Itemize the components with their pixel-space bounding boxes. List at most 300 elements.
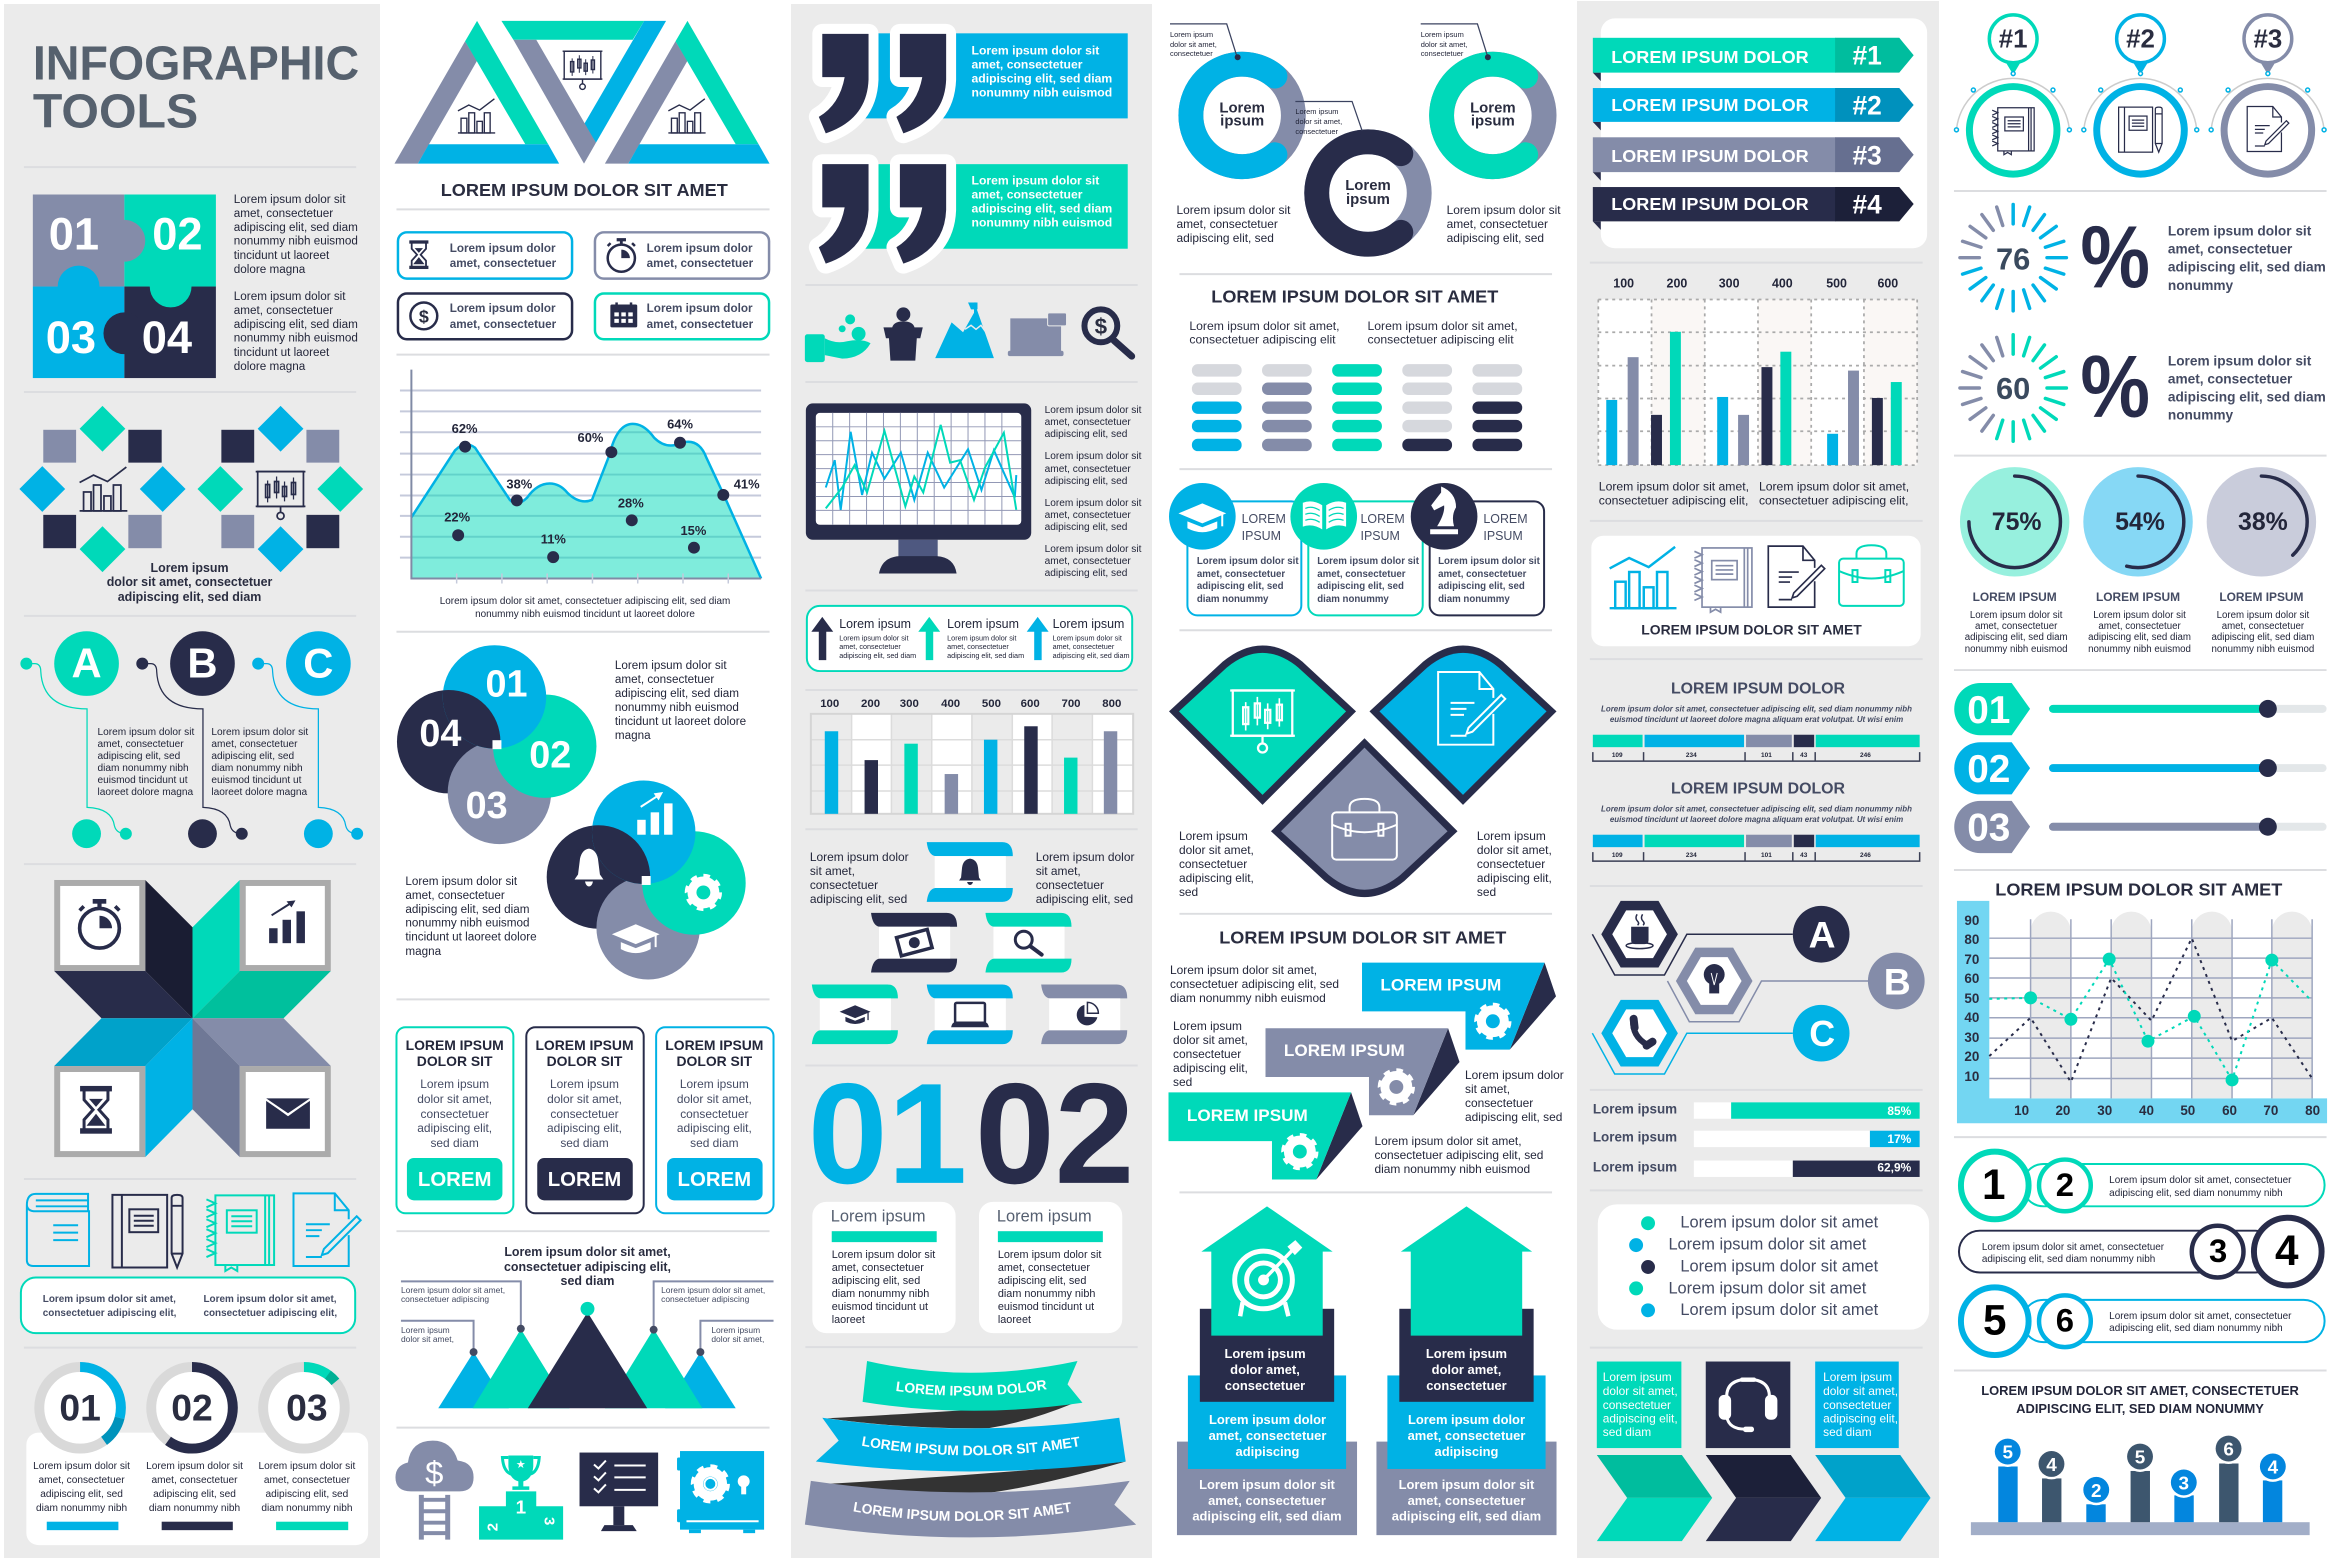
- heading text: consectetuer adipiscing elit: [1367, 333, 1514, 347]
- card navy: adipiscing elit,: [547, 1121, 622, 1135]
- venn icons text: tincidunt ut laoreet dolore: [405, 931, 537, 944]
- donut captions: adipiscing elit, sed: [1176, 231, 1274, 245]
- tag texts: Lorem ipsum dolor sit amet,: [1170, 963, 1317, 977]
- progress circle 75%: [1960, 467, 2069, 655]
- hexagon C: [1592, 1000, 1850, 1074]
- dashed line chart: 60: [1964, 971, 1979, 986]
- venn text: nonummy nibh euismod: [615, 701, 739, 714]
- house stack left: [1177, 1206, 1357, 1535]
- venn numbers: 02: [529, 735, 571, 777]
- lollipop heading: LOREM IPSUM DOLOR SIT AMET, CONSECTETUER: [1981, 1383, 2299, 1398]
- lollipop chart: 2: [2091, 1481, 2102, 1502]
- teal donut: ipsum: [1471, 112, 1515, 129]
- card 01: amet, consectetuer: [832, 1262, 924, 1274]
- house stack right: consectetuer: [1426, 1378, 1507, 1393]
- diamond text: consectetuer: [1477, 857, 1545, 871]
- icon cards: LOREM: [1483, 512, 1528, 526]
- dotted column chart: 600: [1877, 277, 1898, 291]
- arrows box: [807, 606, 1132, 671]
- number pill 3-4: [1959, 1218, 2322, 1285]
- card teal: [396, 1027, 513, 1213]
- ribbon banners: LOREM IPSUM DOLOR: [896, 1380, 1047, 1396]
- tag blue: [1362, 963, 1556, 1050]
- number pill 3-4: adipiscing elit, sed diam nonummy nibh: [1982, 1254, 2155, 1265]
- A B C timeline: C: [303, 640, 333, 687]
- donut callouts: Lorem ipsum: [1295, 107, 1338, 116]
- teal quote banner: [819, 164, 1128, 264]
- A B C timeline: adipiscing elit, sed: [98, 751, 180, 762]
- card navy: DOLOR SIT: [547, 1053, 623, 1069]
- card 01: diam nonummy nibh: [832, 1288, 929, 1300]
- gauge 76 text: Lorem ipsum dolor sit: [2168, 223, 2312, 238]
- donut captions: adipiscing elit, sed: [40, 1489, 123, 1500]
- icon cards: [1169, 483, 1544, 615]
- heading text: Lorem ipsum dolor sit amet,: [1189, 319, 1340, 333]
- progress circle 38%: amet, consectetuer: [2222, 621, 2305, 632]
- card navy: [526, 1027, 644, 1213]
- puzzle text: nonummy nibh euismod: [234, 332, 358, 345]
- icon: monitor checklist: [580, 1453, 658, 1531]
- diamond text: adipiscing elit,: [1179, 871, 1254, 885]
- ribbon text: consectetuer: [810, 878, 878, 892]
- card 02: [979, 1202, 1122, 1333]
- number pill 5-6: adipiscing elit, sed diam nonummy nibh: [2109, 1323, 2283, 1334]
- venn text: Lorem ipsum dolor sit: [615, 659, 727, 672]
- arrows box: Lorem ipsum dolor sit: [839, 634, 909, 643]
- card navy: Lorem ipsum: [550, 1077, 619, 1091]
- card navy: dolor sit amet,: [547, 1092, 622, 1106]
- column chart 100-800: 200: [861, 698, 880, 710]
- venn with icons: [547, 780, 746, 979]
- icons caption box: Lorem ipsum dolor sit amet,: [203, 1294, 337, 1305]
- card teal: dolor sit amet,: [417, 1092, 492, 1106]
- segmented bar 1: LOREM IPSUM DOLOR: [1671, 680, 1846, 697]
- chart text: Lorem ipsum dolor sit amet,: [1759, 479, 1909, 493]
- bullet list: [1598, 1204, 1929, 1330]
- slider 02: 02: [1967, 748, 2010, 791]
- hexagon C: C: [1809, 1014, 1835, 1054]
- chart text: consectetuer adipiscing elit,: [1759, 493, 1909, 507]
- progress circle 75%: 75%: [1992, 508, 2042, 536]
- ranking banners: LOREM IPSUM DOLOR: [1611, 95, 1809, 115]
- icon pills: amet, consectetuer: [647, 318, 754, 331]
- dashed line chart: 30: [1964, 1030, 1979, 1045]
- icon: podium and trophy: 3: [541, 1517, 558, 1525]
- ribbon icon: bell: [927, 842, 1013, 902]
- monitor text: amet, consectetuer: [1045, 464, 1131, 475]
- segmented bar 2: 246: [1860, 852, 1871, 859]
- title: TOOLS: [33, 84, 198, 138]
- tag gray: LOREM IPSUM: [1284, 1042, 1405, 1060]
- progress circle 38%: 38%: [2238, 508, 2288, 536]
- slider 01: [1954, 683, 2327, 735]
- house stack left: adipiscing elit, sed diam: [1192, 1509, 1342, 1524]
- icons caption box: consectetuer adipiscing elit,: [43, 1308, 177, 1319]
- card teal: consectetuer: [421, 1107, 489, 1121]
- number pill 5-6: 6: [2056, 1302, 2074, 1339]
- puzzle text: dolore magna: [234, 360, 306, 373]
- monitor text: amet, consectetuer: [1045, 510, 1131, 521]
- puzzle text: adipiscing elit, sed diam: [234, 318, 358, 331]
- mountain chart heading: sed diam: [561, 1274, 614, 1288]
- icon pills: $: [419, 306, 429, 326]
- icon cards: Lorem ipsum dolor sit: [1317, 556, 1420, 567]
- card navy: consectetuer: [550, 1107, 619, 1121]
- card 01: [812, 1202, 956, 1333]
- puzzle 01-04: [33, 195, 216, 378]
- bullet list: Lorem ipsum dolor sit amet: [1668, 1279, 1867, 1297]
- ribbon banners: [804, 1361, 1136, 1538]
- gauge 60 text: adipiscing elit, sed diam: [2168, 389, 2326, 404]
- house stack left: Lorem ipsum dolor: [1209, 1412, 1326, 1427]
- arrows box: Lorem ipsum dolor sit: [947, 634, 1016, 643]
- blue donut: ipsum: [1220, 112, 1264, 129]
- segmented bar 1: Lorem ipsum dolor sit amet, consectetuer adipiscing elit, sed diam nonummy nibh: [1601, 704, 1912, 713]
- area chart caption: Lorem ipsum dolor sit amet, consectetuer adipiscing elit, sed diam: [440, 596, 730, 607]
- card navy: sed diam: [560, 1136, 609, 1150]
- tag teal: LOREM IPSUM: [1187, 1107, 1308, 1125]
- dotted column chart: 300: [1719, 277, 1740, 291]
- number pill 5-6: 5: [1983, 1297, 2007, 1344]
- icon: podium and trophy: [479, 1456, 563, 1540]
- teal diamond: [1169, 645, 1356, 805]
- card blue: sed diam: [690, 1136, 739, 1150]
- card blue: Lorem ipsum: [680, 1077, 749, 1091]
- gauge 60 text: amet, consectetuer: [2168, 372, 2293, 387]
- icon pills: [398, 232, 769, 339]
- puzzle text: nonummy nibh euismod: [234, 235, 358, 248]
- monitor text: amet, consectetuer: [1045, 556, 1131, 567]
- pin badge 2: [2082, 15, 2199, 174]
- icon cards: Lorem ipsum dolor sit: [1197, 556, 1299, 567]
- number pill 3-4: 4: [2275, 1227, 2299, 1274]
- teal quote banner: nonummy nibh euismod: [972, 215, 1112, 229]
- donut panel: [26, 1433, 368, 1545]
- donut 02: [151, 1367, 233, 1449]
- column chart 100-800: 700: [1061, 698, 1081, 710]
- icon cards: adipiscing elit, sed: [1438, 581, 1525, 592]
- card teal: sed diam: [430, 1136, 479, 1150]
- icon: podium and trophy: 1: [516, 1498, 526, 1519]
- big number 01: 01: [808, 1054, 967, 1214]
- gauge 60 text: Lorem ipsum dolor sit: [2168, 354, 2312, 369]
- donut captions: amet, consectetuer: [151, 1475, 238, 1486]
- blue quote banner: Lorem ipsum dolor sit: [972, 44, 1099, 58]
- donut captions: [33, 1461, 356, 1530]
- puzzle 01-04: 04: [142, 312, 192, 363]
- column chart 100-800: 800: [1102, 698, 1121, 710]
- house stack right: amet, consectetuer: [1408, 1493, 1525, 1508]
- donut captions: amet, consectetuer: [264, 1475, 351, 1486]
- dotted column chart: 200: [1667, 277, 1687, 291]
- horizontal progress bars: [1593, 1101, 1920, 1177]
- percent sign 1: %: [2080, 208, 2150, 307]
- donut captions: diam nonummy nibh: [261, 1503, 353, 1514]
- chart text: consectetuer adipiscing elit,: [1599, 493, 1748, 507]
- dashed line chart: 90: [1964, 913, 1979, 928]
- card 01: euismod tincidunt ut: [832, 1301, 928, 1313]
- card blue: LOREM IPSUM: [665, 1037, 763, 1053]
- card 02: Lorem ipsum: [997, 1208, 1092, 1226]
- dashed line chart: 50: [2180, 1103, 2195, 1118]
- bullet list: Lorem ipsum dolor sit amet: [1680, 1301, 1879, 1319]
- slider 03: [1954, 801, 2327, 853]
- area chart: 38%: [506, 476, 533, 491]
- venn icons text: nonummy nibh euismod: [405, 917, 530, 930]
- donut 03: [263, 1367, 345, 1449]
- icon pills: amet, consectetuer: [450, 257, 557, 270]
- A B C timeline: Lorem ipsum dolor sit: [98, 727, 194, 738]
- chevron text blue: dolor sit amet,: [1823, 1384, 1898, 1398]
- ribbon text: adipiscing elit, sed: [1036, 892, 1133, 906]
- tag texts: dolor sit amet,: [1173, 1033, 1248, 1047]
- ranking banners: #2: [1853, 90, 1882, 120]
- ribbon text: sit amet,: [1036, 864, 1081, 878]
- icon: hand with coins: [805, 314, 871, 362]
- house stack right: adipiscing elit, sed diam: [1392, 1509, 1541, 1524]
- icons panel: [1591, 536, 1921, 646]
- diamond ring with chart icon: [19, 406, 186, 572]
- mountain chart: [401, 1281, 774, 1408]
- bullet list: Lorem ipsum dolor sit amet: [1668, 1236, 1867, 1254]
- icon cards: amet, consectetuer: [1317, 569, 1406, 580]
- mountain chart heading: Lorem ipsum dolor sit amet,: [504, 1245, 671, 1259]
- lollipop chart: 3: [2179, 1473, 2189, 1494]
- ranking banners: #4: [1853, 189, 1882, 219]
- card 02: Lorem ipsum dolor sit: [998, 1249, 1101, 1261]
- A B C timeline: Lorem ipsum dolor sit: [211, 727, 308, 738]
- house stack right: adipiscing: [1435, 1444, 1499, 1459]
- dotted column chart: 500: [1826, 277, 1847, 291]
- A B C timeline: diam nonummy nibh: [211, 763, 303, 774]
- venn icons text: magna: [405, 945, 442, 958]
- chevron text teal: [1597, 1362, 1681, 1448]
- blue quote banner: amet, consectetuer: [972, 58, 1083, 72]
- teal quote banner: Lorem ipsum dolor sit: [972, 174, 1099, 188]
- monitor line chart: [806, 403, 1031, 574]
- dotted column chart: 400: [1772, 277, 1793, 291]
- icon pills: amet, consectetuer: [450, 318, 557, 331]
- venn numbers: 03: [466, 785, 508, 827]
- chevron text teal: Lorem ipsum: [1603, 1370, 1672, 1384]
- card teal: LOREM: [418, 1169, 491, 1191]
- chevron text teal: consectetuer: [1603, 1398, 1671, 1412]
- navy donut: Lorem: [1345, 177, 1391, 194]
- icons caption box: Lorem ipsum dolor sit amet,: [43, 1294, 176, 1305]
- card 01: Lorem ipsum: [831, 1208, 926, 1226]
- area chart: 62%: [452, 421, 478, 436]
- diamond caption: adipiscing elit, sed diam: [118, 590, 261, 604]
- house stack right: Lorem ipsum: [1426, 1346, 1507, 1361]
- number pill 1-2: Lorem ipsum dolor sit amet, consectetuer: [2109, 1175, 2292, 1186]
- columns 3 and 4, lower half: [804, 738, 1564, 1538]
- puzzle text: Lorem ipsum dolor sit: [234, 290, 346, 303]
- radial gauge 76: 76: [1996, 242, 2030, 277]
- navy donut: [1317, 142, 1419, 244]
- horizontal progress bars: Lorem ipsum: [1593, 1130, 1677, 1145]
- venn numbers: [397, 645, 596, 844]
- blue quote banner: nonummy nibh euismod: [972, 86, 1112, 100]
- icon cards: IPSUM: [1242, 529, 1281, 543]
- slider 01: 01: [1967, 689, 2010, 732]
- progress circle 54%: [2083, 467, 2193, 655]
- dotted column chart: 100: [1613, 277, 1634, 291]
- icon cards: IPSUM: [1361, 529, 1400, 543]
- gray diamond: [1271, 738, 1458, 897]
- tag texts: adipiscing elit, sed: [1465, 1110, 1562, 1124]
- pin badge 1: #1: [1999, 25, 2028, 53]
- donut 02: 02: [171, 1387, 213, 1429]
- icon: safe: [677, 1451, 764, 1533]
- card blue: DOLOR SIT: [676, 1053, 753, 1069]
- ribbon icon: pie: [1041, 984, 1127, 1044]
- donut captions: Lorem ipsum dolor sit: [1447, 203, 1561, 217]
- ribbon text: consectetuer: [1036, 878, 1104, 892]
- progress circle 75%: adipiscing elit, sed diam: [1965, 632, 2068, 643]
- icon pills: amet, consectetuer: [647, 257, 754, 270]
- monitor text: adipiscing elit, sed: [1045, 568, 1127, 579]
- dashed line chart: [1957, 901, 2327, 1123]
- dashed line chart: 20: [2055, 1103, 2070, 1118]
- panel: column 5 background: [1577, 1, 1939, 1558]
- number pill 5-6: [1961, 1287, 2325, 1355]
- puzzle 01-04: 03: [46, 312, 96, 363]
- gauge 60 text: nonummy: [2168, 407, 2234, 422]
- tag texts: consectetuer adipiscing elit, sed: [1170, 977, 1339, 991]
- A B C timeline: amet, consectetuer: [98, 739, 184, 750]
- monitor text: adipiscing elit, sed: [1045, 476, 1127, 487]
- dashed line chart: 30: [2097, 1103, 2112, 1118]
- mountain chart: consectetuer adipiscing: [661, 1294, 750, 1304]
- monitor text: Lorem ipsum dolor sit: [1045, 451, 1142, 462]
- icon cards: amet, consectetuer: [1438, 569, 1527, 580]
- area chart: 11%: [541, 532, 566, 547]
- segmented bar 1: euismod tincidunt ut laoreet dolore magna aliquam erat volutpat. Ut wisi enim: [1610, 715, 1903, 724]
- icon: podium and trophy: ★: [516, 1459, 526, 1471]
- area chart: 41%: [734, 476, 760, 491]
- mountain chart: Lorem ipsum: [711, 1325, 760, 1335]
- diamond text: dolor sit amet,: [1179, 843, 1254, 857]
- columns 1 and 2, upper half: [19, 21, 770, 848]
- panel: column 3 background: [791, 4, 1152, 1558]
- icon cards: Lorem ipsum dolor sit: [1438, 556, 1541, 567]
- card blue: LOREM: [678, 1169, 751, 1191]
- icon: magnifier dollar: [1084, 309, 1132, 356]
- teal quote banner: amet, consectetuer: [972, 187, 1083, 201]
- house stack left: adipiscing: [1236, 1444, 1300, 1459]
- donut 03: 03: [286, 1387, 328, 1429]
- icon: mountain flag: [935, 302, 994, 358]
- tag texts: sit amet,: [1465, 1082, 1510, 1096]
- ribbon icon: laptop: [927, 984, 1013, 1044]
- venn numbers: 01: [486, 663, 528, 705]
- teal donut: Lorem: [1470, 99, 1516, 116]
- donut captions: Lorem ipsum dolor sit: [1176, 203, 1291, 217]
- tag texts: diam nonummy nibh euismod: [1374, 1162, 1530, 1176]
- chevron text teal: adipiscing elit,: [1603, 1412, 1678, 1426]
- blue quote banner: adipiscing elit, sed diam: [972, 72, 1112, 86]
- column chart 100-800: 100: [820, 698, 839, 710]
- house stack left: Lorem ipsum dolor sit: [1199, 1477, 1336, 1492]
- icon cards: adipiscing elit, sed: [1197, 581, 1284, 592]
- ribbon text: sit amet,: [810, 864, 855, 878]
- progress circle 54%: adipiscing elit, sed diam: [2088, 632, 2191, 643]
- donut captions: amet, consectetuer: [39, 1475, 125, 1486]
- donut captions: Lorem ipsum dolor sit: [33, 1461, 130, 1472]
- progress circle 54%: amet, consectetuer: [2098, 621, 2181, 632]
- diamond text: sed: [1477, 885, 1496, 899]
- puzzle 01-04: 02: [152, 209, 203, 260]
- tag texts: diam nonummy nibh euismod: [1170, 991, 1326, 1005]
- progress circle 38%: LOREM IPSUM: [2219, 590, 2304, 604]
- donut 01: [39, 1367, 121, 1449]
- dashed line chart: 60: [2222, 1103, 2237, 1118]
- puzzle text: dolore magna: [234, 263, 306, 276]
- progress circle 54%: Lorem ipsum dolor sit: [2093, 610, 2186, 621]
- donut captions: adipiscing elit, sed: [266, 1489, 348, 1500]
- donut callouts: [1170, 24, 1491, 136]
- arrows box: amet, consectetuer: [1053, 642, 1115, 651]
- tag texts: consectetuer: [1173, 1047, 1241, 1061]
- panel: column 1 background: [4, 4, 380, 1558]
- hexagon A: [1592, 901, 1850, 975]
- area chart: 22%: [444, 509, 471, 524]
- gauge 76 text: adipiscing elit, sed diam: [2168, 260, 2326, 275]
- icon cards: LOREM: [1361, 512, 1405, 526]
- segmented bar 1: 101: [1761, 752, 1772, 759]
- chevron text teal: dolor sit amet,: [1603, 1384, 1678, 1398]
- arrows box: Lorem ipsum: [1053, 617, 1124, 631]
- dashed line chart: 10: [1964, 1069, 1979, 1084]
- columns 1 and 2, lower half: [21, 780, 774, 1545]
- number pill 5-6: Lorem ipsum dolor sit amet, consectetuer: [2109, 1311, 2292, 1322]
- A B C timeline: diam nonummy nibh: [98, 763, 189, 774]
- diamond text: Lorem ipsum: [1179, 829, 1248, 843]
- tag texts: adipiscing elit,: [1173, 1061, 1248, 1075]
- donut captions: amet, consectetuer: [1176, 217, 1278, 231]
- progress circle 54%: nonummy nibh euismod: [2088, 644, 2191, 655]
- horizontal progress bars: 62,9%: [1877, 1160, 1912, 1174]
- chevron arrows: [1597, 1455, 1931, 1541]
- dashed line chart: 50: [1964, 991, 1979, 1006]
- donut callouts: Lorem ipsum: [1170, 30, 1213, 39]
- mountain chart: Lorem ipsum: [401, 1325, 450, 1335]
- segmented bar 2: euismod tincidunt ut laoreet dolore magna aliquam erat volutpat. Ut wisi enim: [1610, 815, 1903, 824]
- mountain chart: dolor sit amet,: [401, 1334, 454, 1344]
- venn icons text: adipiscing elit, sed diam: [405, 903, 530, 916]
- diamond caption: dolor sit amet, consectetuer: [107, 575, 273, 589]
- house stack left: dolor amet,: [1230, 1362, 1300, 1377]
- arrows box: Lorem ipsum: [839, 617, 911, 631]
- ribbon text: adipiscing elit, sed: [810, 892, 907, 906]
- ranking banners: #3: [1853, 141, 1882, 171]
- donut captions: Lorem ipsum dolor sit: [259, 1461, 356, 1472]
- donut callouts: dolor sit amet,: [1170, 40, 1217, 49]
- ranking banners: LOREM IPSUM DOLOR: [1611, 146, 1809, 166]
- ranking banners: LOREM IPSUM DOLOR: [1611, 194, 1809, 214]
- column chart 100-800: 400: [941, 698, 960, 710]
- icon: laptop: [1008, 313, 1067, 356]
- dashed line chart: 40: [1964, 1010, 1979, 1025]
- segmented bar 2: 43: [1800, 852, 1808, 859]
- ranking banners: #1: [1853, 41, 1882, 71]
- donut captions: adipiscing elit, sed: [1447, 231, 1544, 245]
- hexagon B: [1667, 948, 1925, 1022]
- donut callouts: consectetuer: [1421, 49, 1464, 58]
- A B C timeline: adipiscing elit, sed: [211, 751, 294, 762]
- donut captions: amet, consectetuer: [1447, 217, 1548, 231]
- blue diamond: [1369, 645, 1557, 805]
